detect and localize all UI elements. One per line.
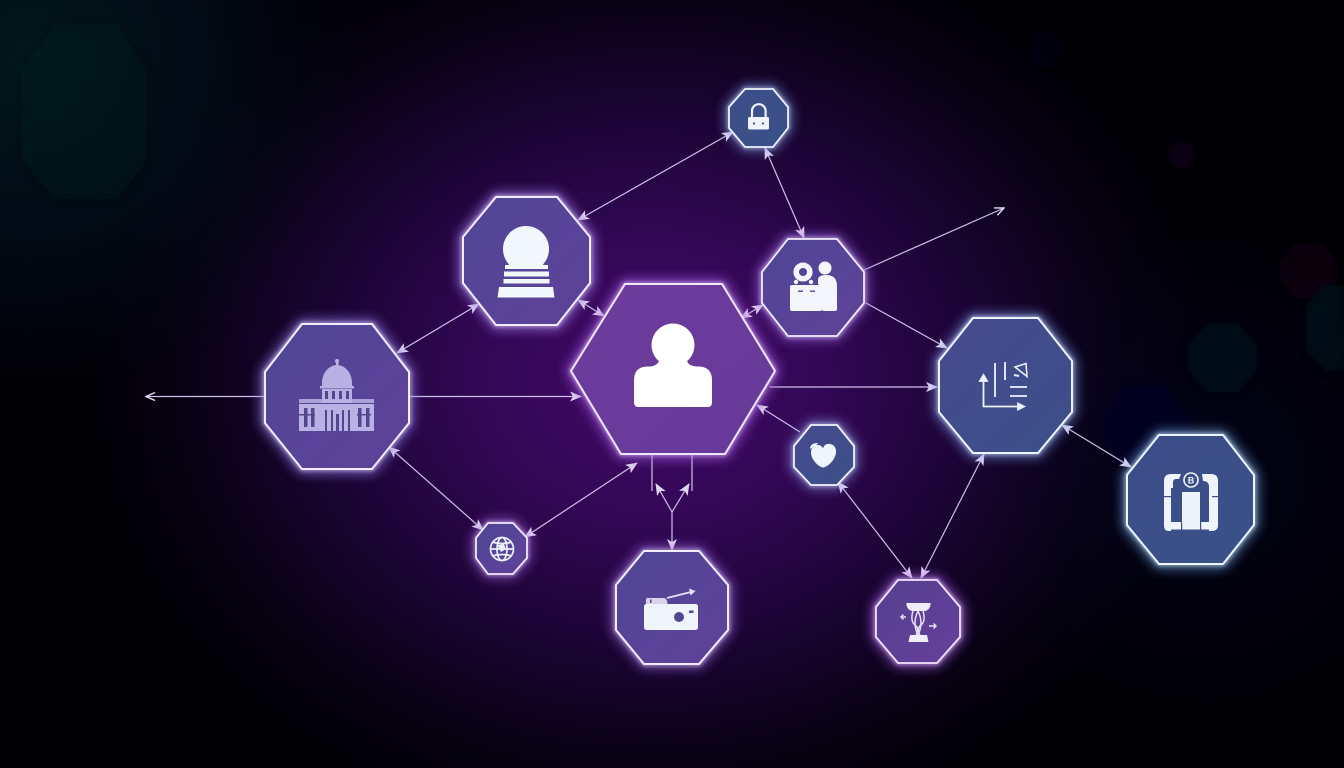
icon: bag with coin: B — [1188, 476, 1195, 486]
icon: heart — [810, 443, 836, 468]
node: scale octagon — [1127, 435, 1254, 564]
connector arrows — [146, 132, 1131, 578]
node: camera octagon — [616, 551, 728, 664]
arrow: chart to scale — [1062, 425, 1131, 467]
icon: person — [634, 324, 712, 407]
arrow: globe to centre — [525, 463, 637, 537]
node: hourglass octagon — [876, 580, 960, 663]
icon: people at a desk — [790, 262, 837, 311]
arrow: team outward — [864, 208, 1004, 270]
node: heart octagon — [794, 425, 854, 485]
icon: hourglass with twisted strands — [901, 603, 936, 642]
icon: domed building — [299, 359, 374, 431]
arrow: crystal ball to centre — [578, 300, 604, 316]
icon: crystal ball — [498, 226, 554, 298]
arrow: crystal ball to building — [397, 304, 479, 353]
arrow: heart to centre — [757, 405, 800, 432]
node: globe octagon — [476, 523, 527, 574]
node: lock octagon — [729, 89, 788, 147]
arrow: chart to hourglass — [921, 454, 984, 578]
node: chart octagon — [939, 318, 1072, 453]
node: central person hexagon — [571, 284, 775, 454]
icon: camera with arrow — [644, 588, 698, 630]
node: crystal ball octagon — [463, 197, 590, 325]
icon: padlock — [748, 104, 769, 130]
arrow: building to centre — [410, 396, 581, 398]
arrow: building outward — [146, 396, 265, 398]
arrow: centre to chart — [770, 386, 937, 388]
arrow: building to globe — [389, 447, 483, 530]
node: team octagon — [762, 239, 864, 336]
arrow: lock to team — [765, 148, 804, 238]
icon: chart with arrows — [980, 362, 1027, 410]
arrow: lock to crystal ball — [578, 132, 733, 220]
icon: globe — [490, 538, 514, 560]
arrow: team to centre — [741, 305, 763, 318]
arrow: team to chart — [866, 303, 947, 348]
arrow: centre to camera fork — [652, 455, 692, 550]
node: building octagon — [265, 324, 409, 469]
arrow: heart to hourglass — [838, 482, 912, 578]
